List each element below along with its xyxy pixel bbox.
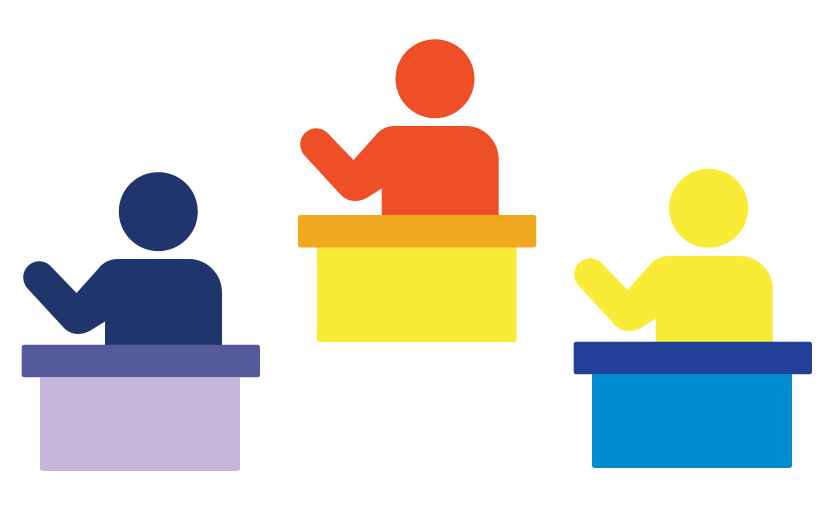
speaker: orange figure at yellow podium — [298, 39, 536, 342]
podium top: amber — [298, 215, 536, 248]
podium top: dark blue — [574, 342, 812, 374]
podium top: purple — [22, 345, 260, 377]
speaker: yellow figure at blue podium — [574, 169, 812, 468]
speaker: navy figure at purple podium — [22, 172, 260, 471]
icon: orange person — [300, 39, 499, 247]
icon: yellow person — [574, 169, 773, 374]
podium base: bright blue — [592, 374, 792, 468]
podium base: yellow — [317, 248, 516, 342]
podium base: lavender — [40, 377, 240, 471]
icon: navy person — [23, 172, 222, 377]
